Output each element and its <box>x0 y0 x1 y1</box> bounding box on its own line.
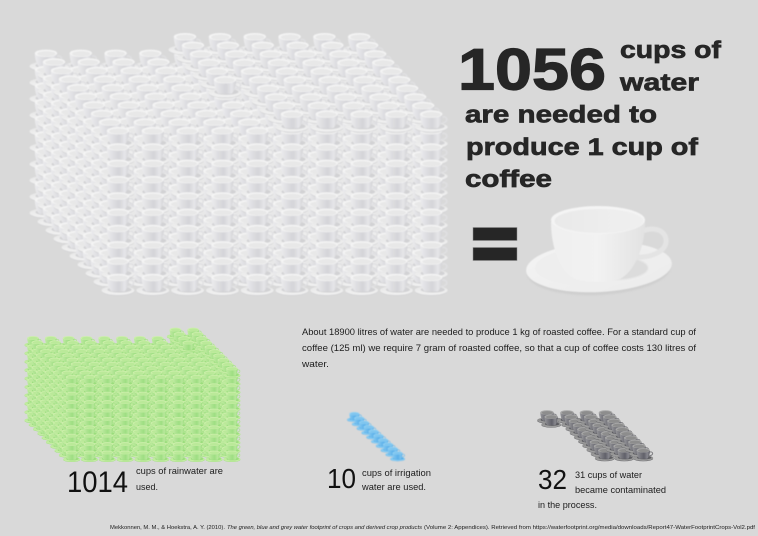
rainwater label: used. <box>136 482 158 493</box>
block of 1056 white cups <box>30 33 448 296</box>
headline: cups of water: cups of <box>620 37 722 64</box>
irrigation label: water are used. <box>361 482 426 493</box>
rainwater label: cups of rainwater are <box>136 466 223 477</box>
source citation: The green, blue and grey water footprint of crops and derived crop products <box>227 525 422 531</box>
equals sign <box>473 228 517 260</box>
source citation: (Volume 2: Appendices). Retrieved from https://waterfootprint.org/media/downloads/Report47-WaterFootprintCrops-Vol2.pdf <box>424 525 755 531</box>
contaminated label <box>538 464 666 511</box>
contaminated label: became contaminated <box>575 485 666 496</box>
source citation: Mekkonnen, M. M., & Hoekstra, A. Y. (2010). <box>110 525 225 531</box>
contaminated label: 31 cups of water <box>575 470 642 481</box>
rainwater label: 1014 <box>67 466 128 499</box>
big number 1056: 1056 <box>458 37 606 102</box>
description paragraph: About 18900 litres of water are needed to produce 1 kg of roasted coffee. For a standard cup of <box>302 327 696 337</box>
description paragraph: water. <box>301 359 329 369</box>
headline: cups of water <box>619 37 722 96</box>
irrigation label <box>327 463 431 494</box>
block of 1014 green rainwater cups <box>24 328 240 462</box>
headline: are needed to produce 1 cup of coffee <box>465 102 699 193</box>
headline: are needed to produce 1 cup of coffee: produce 1 cup of <box>466 134 699 161</box>
irrigation label: 10 <box>327 463 356 494</box>
icon: coffee cup and saucer <box>525 206 673 299</box>
headline: cups of water: water <box>619 70 700 96</box>
contaminated label: 32 <box>538 464 567 495</box>
rainwater label <box>67 466 223 499</box>
description paragraph <box>301 327 696 369</box>
headline: are needed to produce 1 cup of coffee: coffee <box>465 166 552 193</box>
headline: are needed to produce 1 cup of coffee: are needed to <box>465 102 657 128</box>
32 grey contaminated cups <box>537 410 653 461</box>
description paragraph: coffee (125 ml) we require 7 gram of roasted coffee, so that a cup of coffee costs 130 litres of <box>302 343 696 353</box>
row of 10 blue irrigation cups <box>347 412 405 461</box>
source citation <box>110 525 755 531</box>
irrigation label: cups of irrigation <box>362 468 431 479</box>
headline <box>458 37 722 193</box>
contaminated label: in the process. <box>538 500 597 511</box>
